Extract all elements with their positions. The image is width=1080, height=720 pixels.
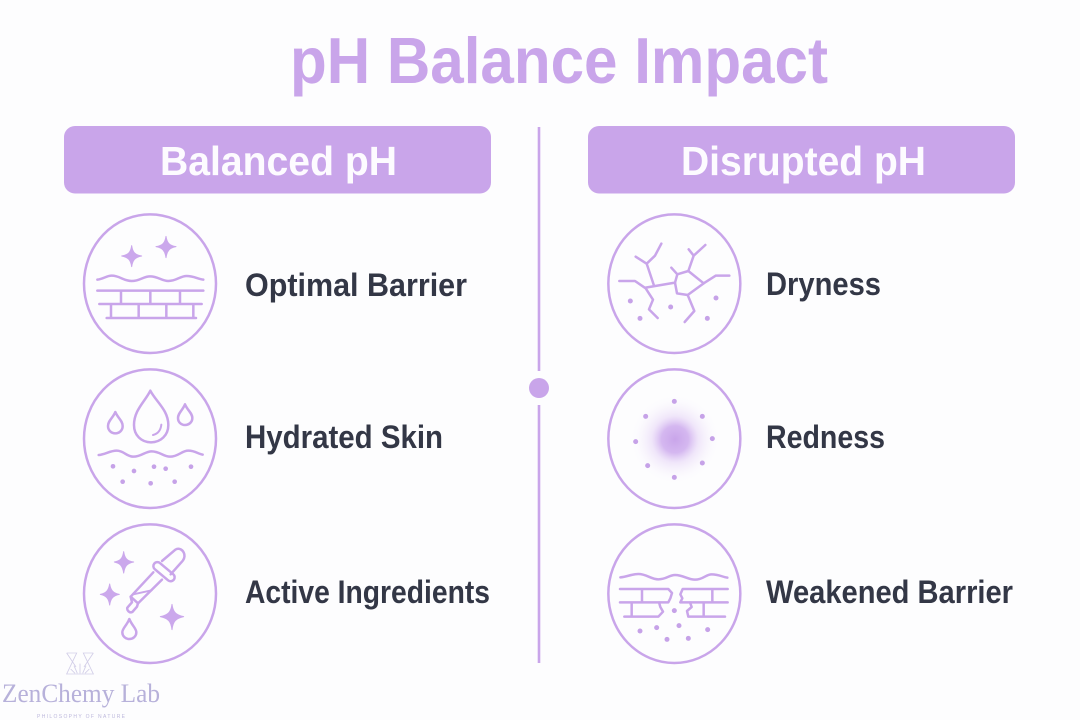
logo tagline: PHILOSOPHY OF NATURE: [37, 714, 126, 720]
logo: ZenChemy Lab: [2, 653, 160, 708]
logo mark: [67, 653, 93, 674]
icon: dryness cracks: [608, 214, 740, 353]
panel header: Balanced pH: Balanced pH: [160, 138, 397, 184]
label: Hydrated Skin: Hydrated Skin: [245, 419, 443, 455]
title: pH Balance Impact: [290, 24, 828, 97]
icon: hydrated skin: [84, 369, 216, 508]
label: Redness: Redness: [766, 419, 885, 455]
center divider with dot: [529, 127, 549, 663]
icon: weakened barrier: [608, 524, 740, 663]
panel header: Balanced pH: [64, 126, 491, 194]
panel header: Disrupted pH: [588, 126, 1015, 194]
panel header: Disrupted pH: Disrupted pH: [681, 138, 926, 184]
label: Dryness: Dryness: [766, 266, 881, 302]
icon: active ingredients dropper: [84, 524, 216, 663]
icon: optimal barrier: [84, 214, 216, 353]
icon: redness glow: [608, 369, 740, 508]
label: Optimal Barrier: Optimal Barrier: [245, 267, 467, 303]
label: Active Ingredients: Active Ingredients: [245, 574, 490, 610]
logo wordmark: ZenChemy Lab: [2, 679, 160, 708]
label: Weakened Barrier: Weakened Barrier: [766, 574, 1013, 610]
